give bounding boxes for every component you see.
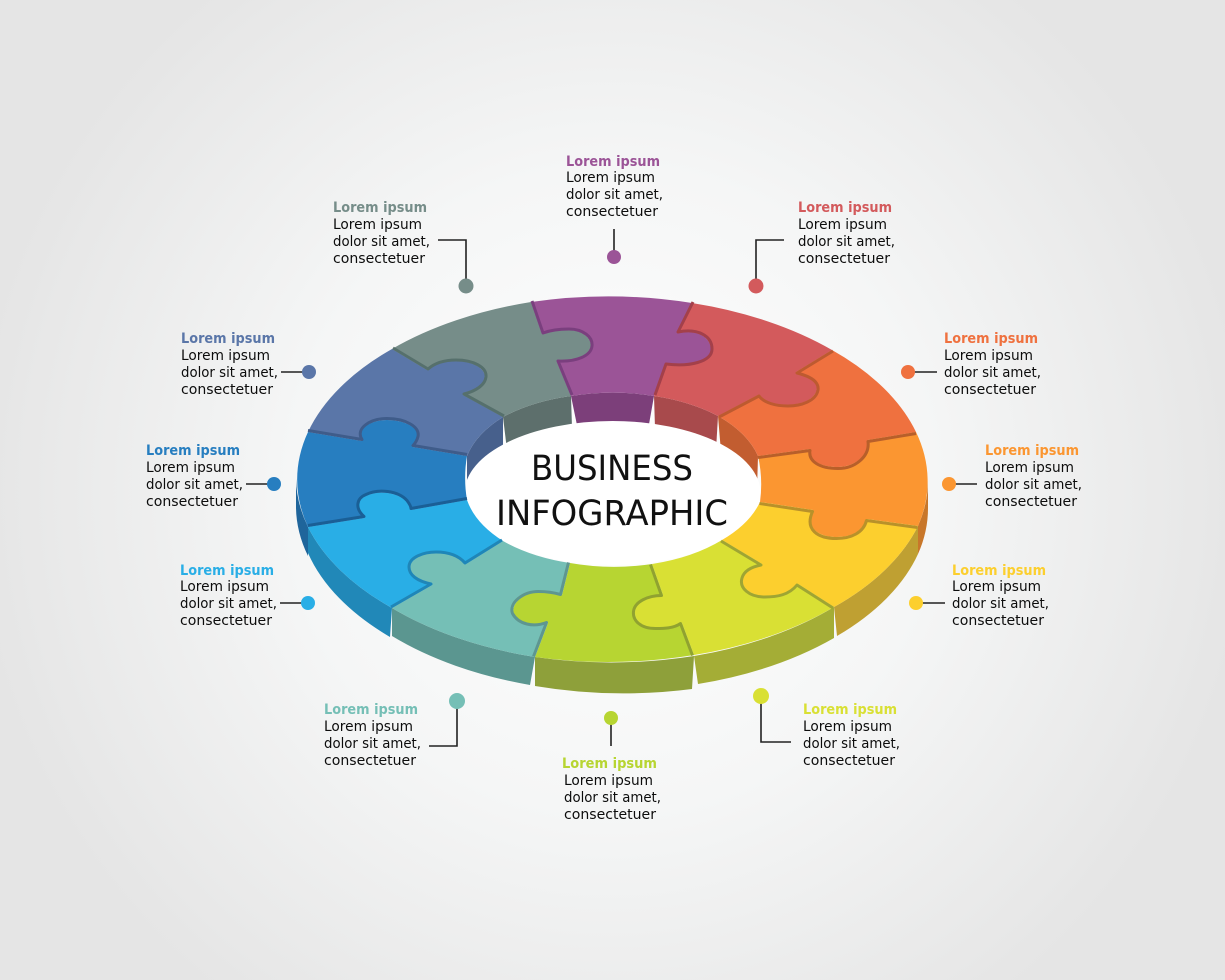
puzzle piece: teal: [392, 541, 570, 657]
callout: grey: Lorem ipsum: [333, 200, 427, 216]
callout: royal blue: [146, 443, 281, 510]
callout: red: [748, 200, 895, 294]
callout: teal: Lorem ipsum: [324, 719, 413, 735]
title: [496, 449, 728, 534]
callout: royal blue: dolor sit amet,: [146, 477, 243, 493]
callout: teal: consectetuer: [324, 753, 416, 769]
puzzle piece: grey: [392, 302, 591, 417]
callout: steel blue: consectetuer: [181, 382, 273, 398]
callout: yellow: consectetuer: [952, 613, 1044, 629]
callout: amber: [942, 443, 1082, 510]
puzzle piece: green: [513, 563, 694, 662]
puzzle piece: amber: [758, 432, 928, 537]
puzzle joint shadows: [308, 301, 918, 656]
callout: yellow: Lorem ipsum: [952, 563, 1046, 579]
callout: grey: dolor sit amet,: [333, 234, 430, 250]
callout: steel blue: Lorem ipsum: [181, 331, 275, 347]
callout: purple: Lorem ipsum: [566, 154, 660, 170]
callout: purple: dolor sit amet,: [566, 187, 663, 203]
callout: amber: Lorem ipsum: [985, 460, 1074, 476]
callout: red: Lorem ipsum: [798, 200, 892, 216]
callout: teal: Lorem ipsum: [324, 702, 418, 718]
callout: yellow: dolor sit amet,: [952, 596, 1049, 612]
callout: grey: consectetuer: [333, 251, 425, 267]
title: BUSINESS: [531, 449, 693, 489]
callout: steel blue: Lorem ipsum: [181, 348, 270, 364]
callout: light blue: Lorem ipsum: [180, 579, 269, 595]
callout: lime: consectetuer: [803, 753, 895, 769]
puzzle piece: red: [654, 303, 832, 416]
callout: lime: Lorem ipsum: [803, 702, 897, 718]
callout: orange: [901, 331, 1041, 398]
callout: lime: [753, 688, 900, 769]
callout: green: Lorem ipsum: [562, 756, 657, 772]
callout: light blue: consectetuer: [180, 613, 272, 629]
callout: purple: consectetuer: [566, 204, 658, 220]
callout: purple: Lorem ipsum: [566, 170, 655, 186]
puzzle piece: light blue: [308, 493, 503, 608]
callout: amber: Lorem ipsum: [985, 443, 1079, 459]
puzzle ring side walls: [296, 393, 928, 693]
callout: purple: [566, 154, 663, 264]
callout: light blue: [180, 563, 315, 629]
puzzle piece: steel blue: [308, 349, 503, 456]
callout: orange: dolor sit amet,: [944, 365, 1041, 381]
callout: light blue: dolor sit amet,: [180, 596, 277, 612]
callout: grey: [333, 200, 474, 294]
puzzle piece: royal blue: [297, 420, 467, 527]
callout: orange: consectetuer: [944, 382, 1036, 398]
callout: green: Lorem ipsum: [564, 773, 653, 789]
callout: amber: dolor sit amet,: [985, 477, 1082, 493]
callout: yellow: [909, 563, 1049, 629]
callout: teal: dolor sit amet,: [324, 736, 421, 752]
puzzle piece: lime: [635, 540, 834, 655]
callout: orange: Lorem ipsum: [944, 331, 1038, 347]
callout: light blue: Lorem ipsum: [180, 563, 274, 579]
callout: red: consectetuer: [798, 251, 890, 267]
puzzle piece: purple: [531, 296, 711, 396]
callout: green: dolor sit amet,: [564, 790, 661, 806]
callout: steel blue: dolor sit amet,: [181, 365, 278, 381]
callout: royal blue: Lorem ipsum: [146, 443, 240, 459]
central white hole: [464, 421, 760, 565]
puzzle piece: yellow: [722, 502, 918, 607]
callout: red: dolor sit amet,: [798, 234, 895, 250]
callout: green: [562, 711, 661, 823]
callout: lime: dolor sit amet,: [803, 736, 900, 752]
callout: green: consectetuer: [564, 807, 656, 823]
callout: orange: Lorem ipsum: [944, 348, 1033, 364]
callout: amber: consectetuer: [985, 494, 1077, 510]
callout: red: Lorem ipsum: [798, 217, 887, 233]
callout: royal blue: consectetuer: [146, 494, 238, 510]
callout: royal blue: Lorem ipsum: [146, 460, 235, 476]
callout: teal: [324, 693, 465, 769]
title: INFOGRAPHIC: [496, 494, 728, 534]
callout: yellow: Lorem ipsum: [952, 579, 1041, 595]
callout: steel blue: [181, 331, 316, 398]
puzzle piece: orange: [718, 350, 916, 467]
callout: grey: Lorem ipsum: [333, 217, 422, 233]
callout: lime: Lorem ipsum: [803, 719, 892, 735]
